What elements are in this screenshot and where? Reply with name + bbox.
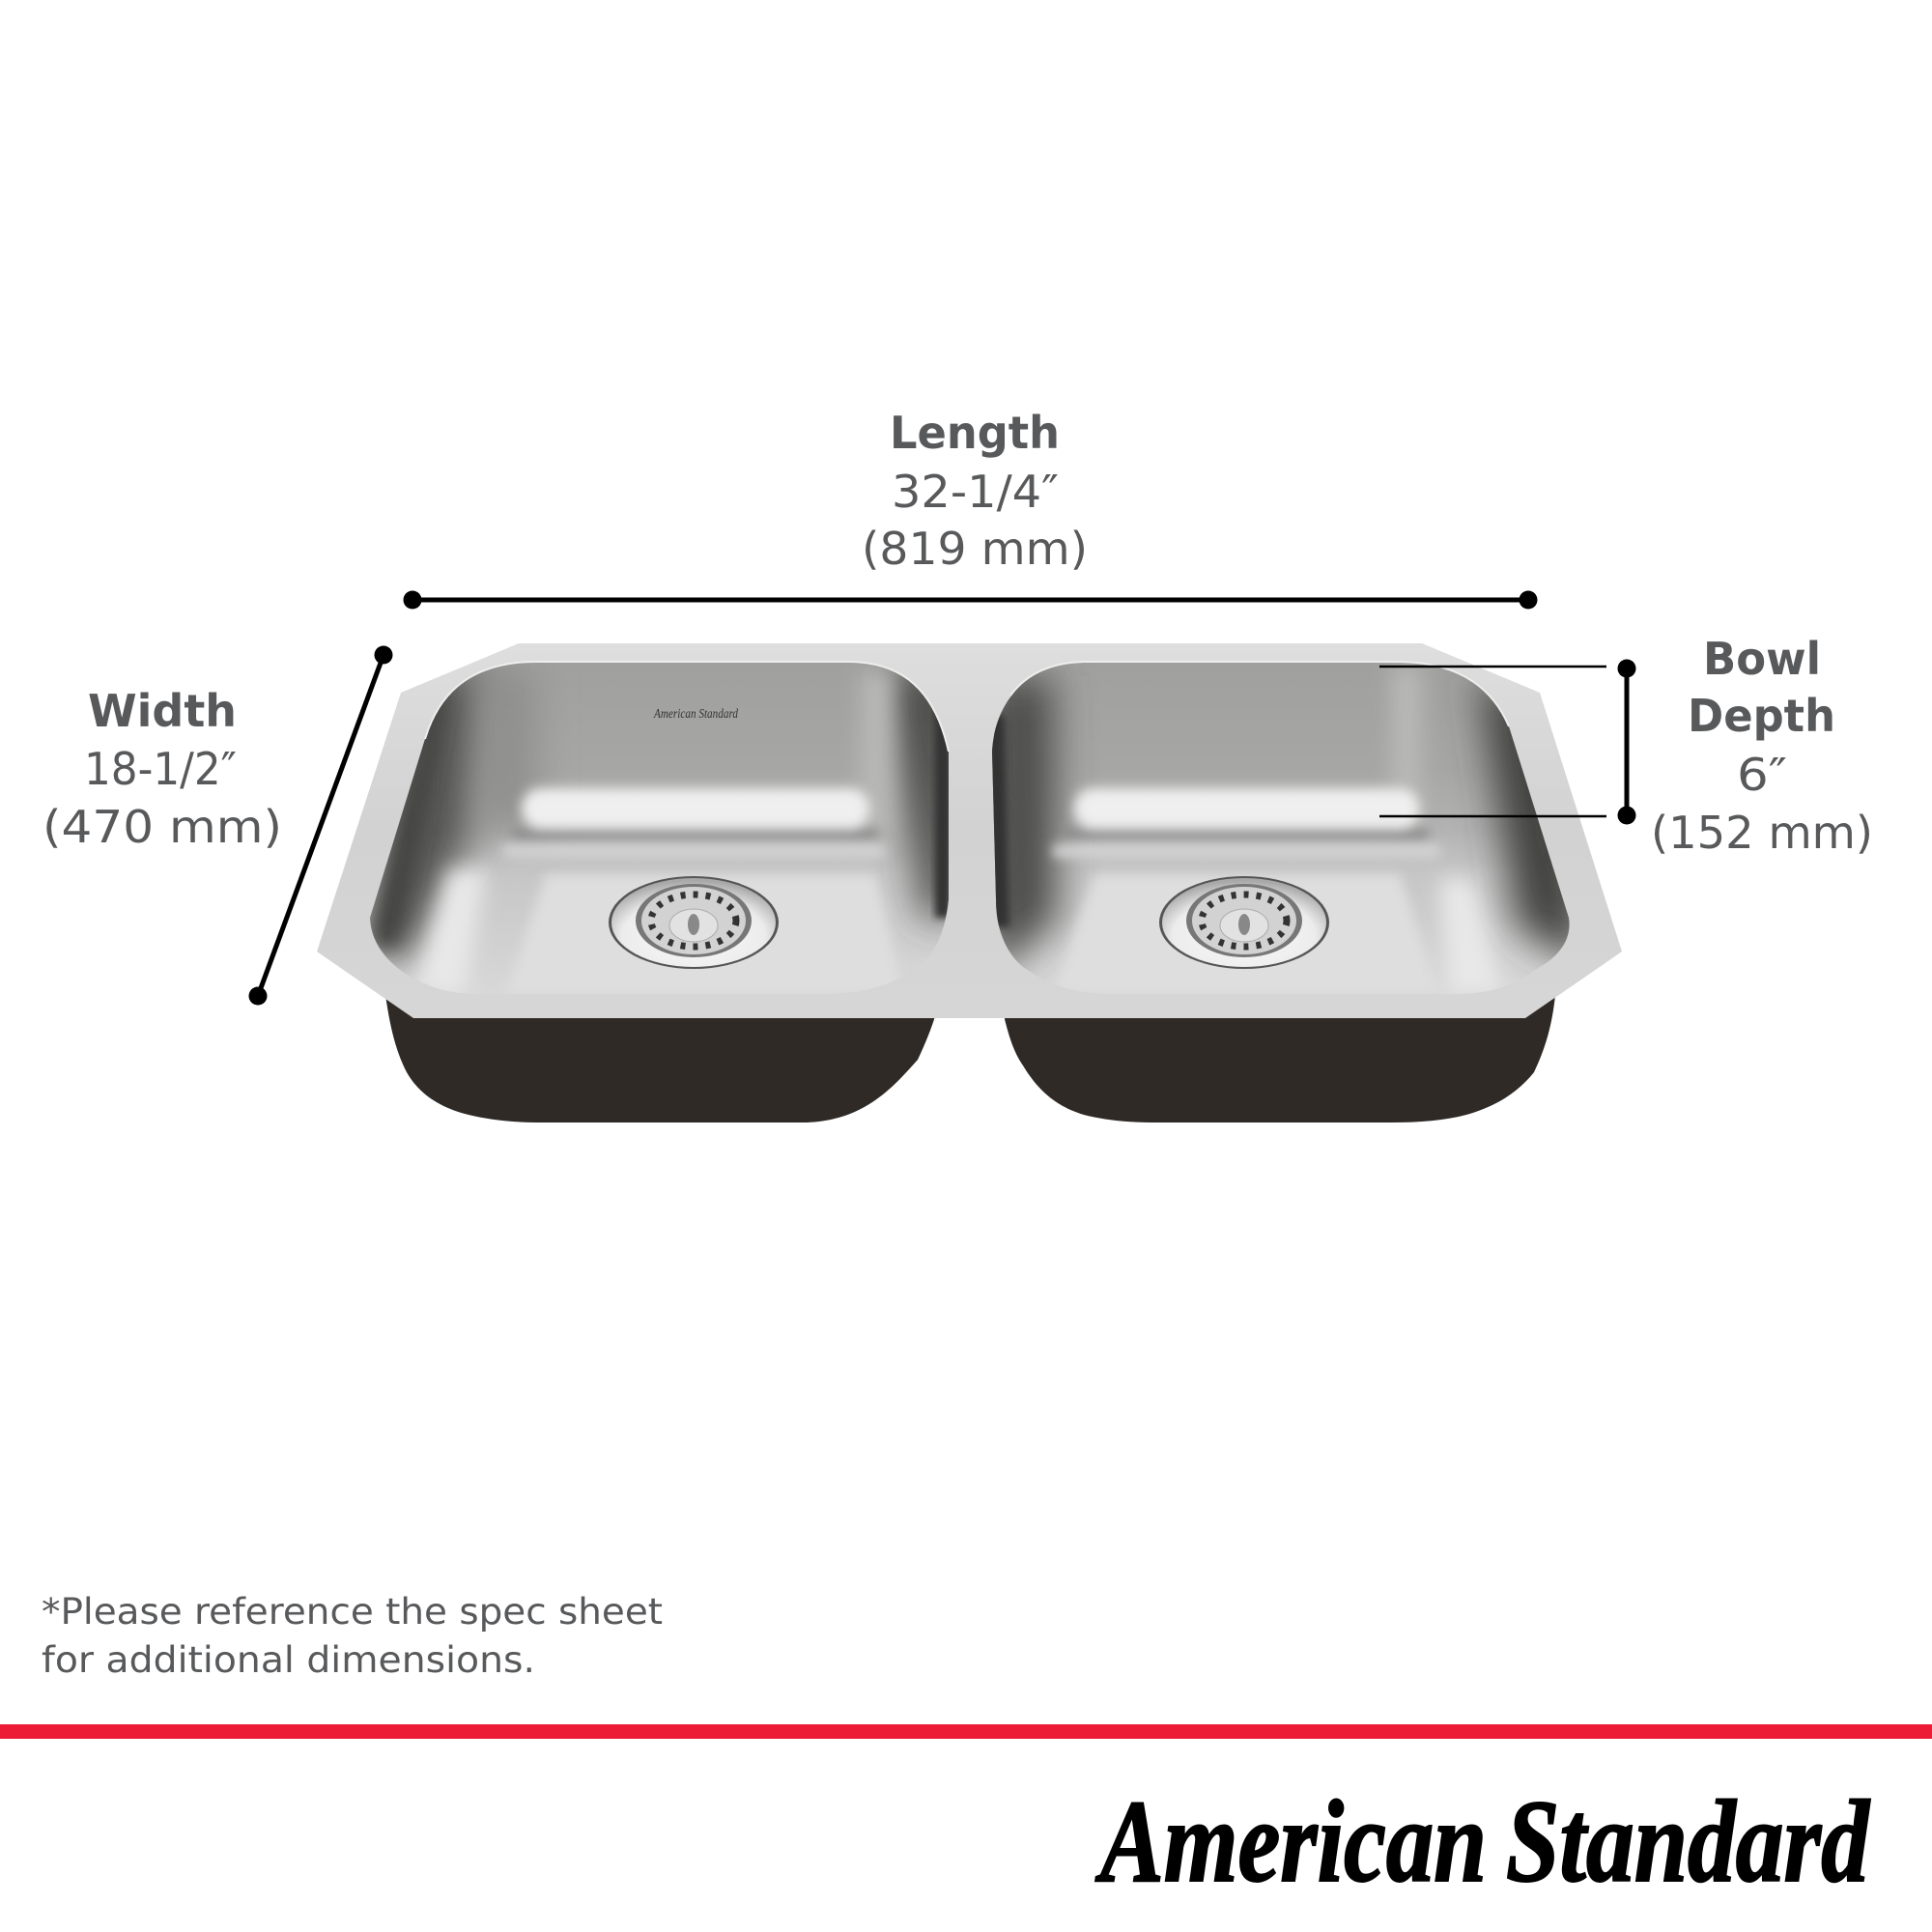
width label bbox=[43, 685, 282, 853]
footnote: *Please reference the spec sheet bbox=[42, 1591, 663, 1633]
left drain bbox=[609, 876, 779, 969]
length label: Length bbox=[890, 407, 1060, 459]
bowl depth label bbox=[1651, 633, 1873, 859]
length label: (819 mm) bbox=[862, 523, 1088, 575]
stainless rim bbox=[317, 643, 1622, 1018]
right bowl bbox=[985, 657, 1584, 1000]
width label: (470 mm) bbox=[43, 801, 282, 853]
red divider bar bbox=[0, 1724, 1932, 1739]
length label: 32-1/4″ bbox=[892, 466, 1059, 518]
length dimension arrow bbox=[404, 591, 1538, 609]
bowl depth dimension arrow bbox=[1379, 659, 1636, 825]
sink dimensions infographic bbox=[0, 413, 1932, 1884]
bowl depth label: Depth bbox=[1688, 690, 1835, 742]
bowl depth label: 6″ bbox=[1737, 749, 1787, 801]
left bowl rim highlight bbox=[425, 662, 949, 752]
left bowl underside bbox=[385, 995, 935, 1122]
right drain bbox=[1159, 876, 1329, 969]
American Standard logo bbox=[1094, 1776, 1871, 1907]
footnote: for additional dimensions. bbox=[42, 1639, 535, 1681]
American Standard logo: American bbox=[1094, 1776, 1487, 1907]
bowl depth label: Bowl bbox=[1703, 633, 1821, 685]
length label bbox=[862, 407, 1088, 575]
right bowl underside bbox=[1005, 995, 1555, 1122]
bowl depth label: (152 mm) bbox=[1651, 807, 1873, 859]
footnote bbox=[42, 1591, 663, 1681]
sink product photo bbox=[317, 643, 1622, 1122]
width dimension arrow bbox=[249, 645, 392, 1005]
width label: Width bbox=[88, 685, 237, 737]
width label: 18-1/2″ bbox=[84, 743, 237, 795]
bowl logo: American Standard bbox=[653, 707, 739, 722]
right bowl rim highlight bbox=[1010, 662, 1509, 726]
left bowl bbox=[357, 657, 956, 1000]
